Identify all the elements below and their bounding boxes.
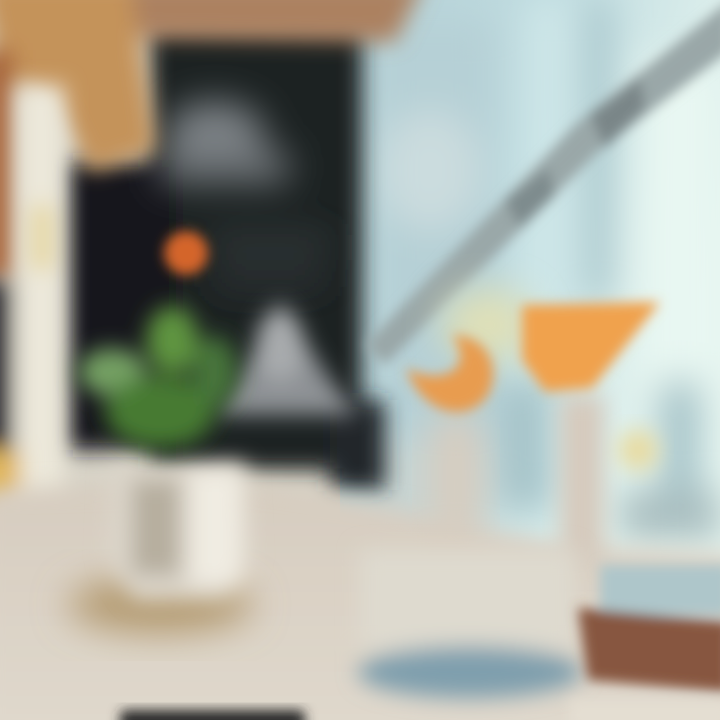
orange slice: [406, 335, 493, 412]
orange garnish: [522, 302, 660, 392]
orange dot on board: [164, 231, 208, 275]
right glass with orange garnish: [522, 302, 660, 565]
dark board: [66, 25, 385, 490]
brown tray at right: [570, 565, 720, 720]
glass stem: [434, 415, 478, 545]
plant wooden coaster: [68, 577, 252, 633]
window diagonal frame: [365, 0, 720, 365]
dark object at bottom edge: [120, 710, 305, 720]
pale citrus: [442, 289, 534, 361]
left white column: [0, 85, 66, 720]
wooden top beam: [0, 0, 425, 280]
left glass with orange slice: [406, 289, 534, 545]
window background: [340, 0, 720, 580]
glass stem: [560, 395, 604, 565]
counter: [0, 480, 720, 720]
board mountain drawing: [215, 300, 358, 415]
small yellow accent: [618, 430, 658, 470]
board chalk drawings: [160, 101, 330, 284]
plant in white pot: [68, 306, 252, 633]
plant leaves: [78, 306, 237, 448]
plant pot: [108, 462, 250, 600]
glass base and reflections on table: [358, 550, 582, 698]
